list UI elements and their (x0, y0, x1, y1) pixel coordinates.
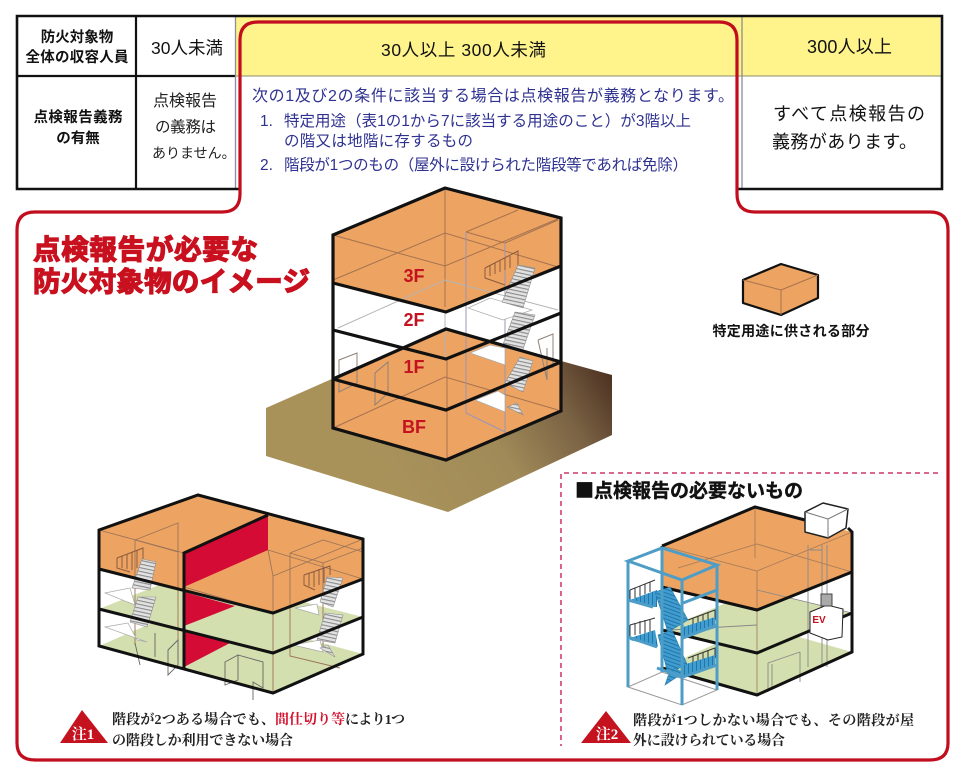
note 1 badge: 注1 (72, 725, 94, 743)
handrail (485, 251, 518, 285)
note 1 text: 間仕切り等 (275, 711, 345, 728)
red partition (184, 515, 268, 667)
floor labels (402, 266, 426, 437)
dashed frame (561, 473, 938, 746)
row heading: occupants (26, 28, 129, 66)
note 1 text: の階段しか利用できない場合 (112, 732, 293, 749)
outlines (662, 507, 852, 695)
note 2 badge: 注2 (596, 725, 618, 743)
row heading: duty: 点検報告義務 (34, 108, 123, 126)
row heading: duty: の有無 (56, 130, 100, 147)
body (99, 495, 363, 693)
cell: conditions (252, 87, 734, 174)
row heading: duty (34, 108, 123, 147)
note 1 text: 階段が2つある場合でも、 (112, 711, 275, 728)
cell: no duty: の義務は (155, 118, 216, 136)
cell: all have duty: 義務があります。 (772, 132, 917, 152)
table grid (17, 16, 942, 189)
cell: no duty: ありません。 (152, 145, 236, 161)
legend label: 特定用途に供される部分 (712, 323, 870, 339)
handrails (117, 548, 330, 590)
landings (105, 588, 323, 652)
cell: all have duty (772, 104, 925, 152)
note 1 badge (60, 710, 108, 743)
cell: conditions: 次の1及び2の条件に該当する場合は点検報告が義務となります。 (252, 87, 734, 105)
legend box (743, 264, 818, 315)
cell: no duty (152, 92, 236, 161)
stairs (130, 559, 343, 657)
table header yellow cells (236, 17, 940, 76)
table (17, 16, 942, 189)
elevator machine box (805, 503, 848, 538)
legend (712, 264, 870, 339)
frame (628, 548, 717, 705)
green floors (662, 590, 852, 695)
note 2 (581, 711, 914, 749)
main building (333, 188, 561, 460)
cell: over 300: 300人以上 (807, 37, 892, 57)
orange 1F and BF (333, 329, 561, 460)
elevator car: EV (812, 615, 826, 626)
cell: conditions: 1. (260, 113, 273, 130)
cell: under 30: 30人未満 (151, 38, 223, 58)
cell: 30 to under 300: 30人以上 300人未満 (381, 40, 546, 60)
building body (333, 188, 561, 460)
section heading: ■点検報告の必要ないもの (575, 476, 803, 503)
note 1 (60, 710, 405, 749)
cell: all have duty: すべて点検報告の (773, 104, 925, 124)
cell: conditions: 階段が1つのもの（屋外に設けられた階段等であれば免除） (284, 156, 688, 174)
orange top (99, 495, 363, 613)
title: 点検報告が必要な (33, 234, 258, 265)
cell: conditions: 2. (260, 157, 273, 174)
stairs (502, 265, 535, 415)
note 2 badge (581, 711, 631, 743)
landings (630, 590, 715, 677)
ground plane (266, 329, 612, 512)
row heading: occupants: 防火対象物 (41, 28, 113, 46)
body (662, 507, 852, 695)
title (33, 234, 310, 297)
orange 3F block (333, 188, 561, 312)
floor labels: 1F (403, 357, 425, 377)
orange top (662, 507, 852, 610)
stair flights (655, 587, 688, 685)
external stair frame (628, 548, 717, 705)
panel: not required (561, 473, 938, 749)
floor labels: BF (402, 417, 426, 437)
railings (630, 580, 715, 666)
elevator car (810, 594, 843, 640)
floor labels: 2F (403, 310, 425, 330)
floor labels: 3F (403, 266, 425, 286)
cell: conditions: 特定用途（表1の1から7に該当する用途のこと）が3階以上 (284, 112, 691, 130)
wireframe (99, 523, 363, 700)
outlines (99, 495, 363, 693)
note 2 text (633, 712, 914, 749)
cell: no duty: 点検報告 (153, 92, 217, 110)
cell: conditions: の階又は地階に存するもの (284, 132, 473, 150)
right building (628, 503, 852, 705)
note 1 text (112, 711, 405, 749)
title: 防火対象物のイメージ (33, 266, 310, 297)
row heading: occupants: 全体の収容人員 (26, 48, 129, 66)
base (628, 672, 717, 705)
wireframe (662, 507, 852, 695)
green floors (99, 573, 363, 693)
interior wireframe (333, 188, 560, 460)
note 1 text: により1つ (345, 712, 405, 728)
landings (468, 298, 532, 412)
left building (99, 495, 363, 700)
note 2 text: 外に設けられている場合 (633, 732, 785, 749)
note 2 text: 階段が1つしかない場合でも、その階段が屋 (633, 712, 914, 729)
structural outlines (333, 188, 561, 460)
